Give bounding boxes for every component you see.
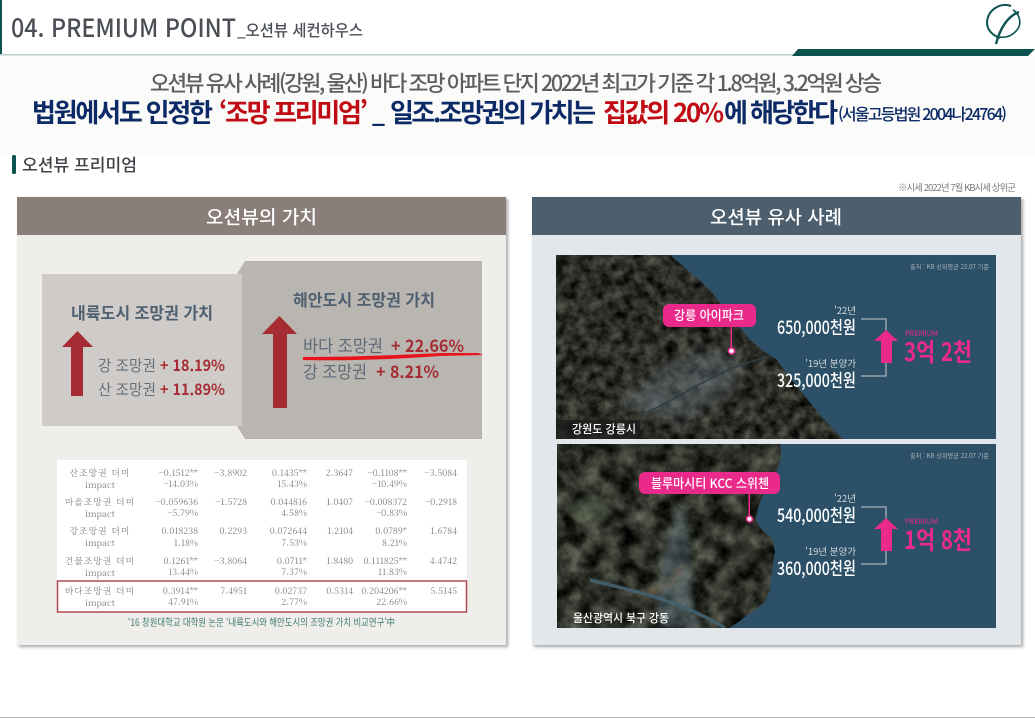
inland view values: 강 조망권 <box>98 354 156 376</box>
regression table: 2.77% <box>281 595 307 608</box>
coastal view values: 강 조망권 <box>303 358 367 383</box>
panel header: cases: 오션뷰 유사 사례 <box>710 204 842 230</box>
regression table: 0.0711* <box>277 554 308 567</box>
regression table: 0.0789* <box>375 524 408 537</box>
prices: '22년 <box>834 491 856 505</box>
headline line 2 <box>32 93 1007 130</box>
prices: 360,000천원 <box>777 555 856 581</box>
premium value: 1억 8천 <box>904 521 972 557</box>
highlighted sea view row <box>58 581 466 612</box>
regression table: −0.1512** <box>159 466 199 479</box>
regression table: −0.059636 <box>156 495 198 508</box>
regression table: 0.1261** <box>164 554 199 567</box>
regression table: 0.5314 <box>326 584 353 597</box>
panel header: value <box>17 197 506 235</box>
map: Gangneung <box>556 255 996 439</box>
map source: 출처 : KB 상위평균 22.07 기준 <box>910 450 989 460</box>
regression table: 1.0407 <box>326 495 353 508</box>
regression table: −0.008372 <box>365 495 407 508</box>
regression table: 0.044816 <box>271 495 307 508</box>
regression table: 건물조망권 더미 <box>65 554 135 567</box>
regression table: −3.5084 <box>425 466 457 479</box>
callout: complex pin: 블루마시티 KCC 스위첸 <box>651 473 769 492</box>
inland city box <box>42 274 242 426</box>
prices <box>777 491 856 581</box>
title: 04. PREMIUM POINT <box>11 9 236 45</box>
regression table: 7.53% <box>281 536 307 549</box>
regression table: 0.072644 <box>270 524 307 537</box>
map source: 출처 : KB 상위평균 22.07 기준 <box>910 261 989 271</box>
inland view values: + 11.89% <box>160 378 225 400</box>
regression table: 7.4951 <box>220 584 247 597</box>
prices: 650,000천원 <box>777 314 856 340</box>
regression table: −10.49% <box>372 477 407 490</box>
headline line 2: 에 해당한다 <box>724 93 838 130</box>
icon: coastal up arrow <box>262 316 297 408</box>
regression table: 7.37% <box>281 565 307 578</box>
regression table: 47.91% <box>168 595 198 608</box>
map: Ulsan <box>557 444 996 628</box>
premium value: 3억 2천 <box>904 333 972 369</box>
title <box>11 9 363 45</box>
regression table: 8.21% <box>382 536 407 549</box>
inland view values <box>98 354 225 400</box>
panel: similar ocean view cases <box>532 197 1021 645</box>
regression table <box>57 460 467 612</box>
panel header: value: 오션뷰의 가치 <box>206 204 317 230</box>
section heading: 오션뷰 프리미엄 <box>22 151 137 176</box>
headline line 2: _ <box>372 93 385 130</box>
premium value: PREMIUM <box>905 516 938 527</box>
logo icon <box>987 5 1020 44</box>
headline line 2: 일조.조망권의 가치는 <box>390 93 596 130</box>
regression table: 0.02737 <box>275 584 307 597</box>
prices <box>777 303 856 393</box>
regression table: impact <box>85 478 116 491</box>
prices: '19년 분양가 <box>805 356 856 370</box>
icon: premium bracket arrow <box>861 507 898 564</box>
table source caption: ‘16 창원대학교 대학원 논문 ‘내륙도시와 해안도시의 조망권 가치 비교연구’中 <box>128 614 395 629</box>
regression table: 2.3647 <box>326 466 353 479</box>
callout: complex pin <box>639 472 780 522</box>
callout: complex pin <box>663 304 756 354</box>
coastal view values: 바다 조망권 <box>303 332 383 357</box>
regression table: impact <box>85 596 116 609</box>
regression table: 11.83% <box>378 565 407 578</box>
regression table: 1.2104 <box>327 524 353 537</box>
regression table: −3.8902 <box>214 466 247 479</box>
headline line 2: 법원에서도 인정한 <box>32 93 213 130</box>
prices: 540,000천원 <box>777 502 856 528</box>
callout: complex pin: 강릉 아이파크 <box>674 305 744 324</box>
regression table: −0.1108** <box>368 466 408 479</box>
regression table: impact <box>85 566 116 579</box>
regression table: 마을조망권 더미 <box>65 495 135 508</box>
map label: region: 울산광역시 북구 강동 <box>573 610 669 626</box>
title: _오션뷰 세컨하우스 <box>237 17 363 41</box>
headline band <box>0 56 1035 154</box>
regression table: 0.1435** <box>272 466 308 479</box>
headline line 2: ‘조망 프리미엄’ <box>219 93 368 130</box>
headline line 2: (서울고등법원 2004나24764) <box>838 101 1007 125</box>
inland view values: 산 조망권 <box>98 378 156 400</box>
coastal city box <box>237 261 483 439</box>
regression table: 0.204206** <box>361 584 408 597</box>
regression table: 0.3914** <box>163 584 199 597</box>
coastal view values <box>303 332 464 383</box>
inland city box: 내륙도시 조망권 가치 <box>71 300 213 324</box>
regression table: −1.5728 <box>215 495 247 508</box>
prices: 325,000천원 <box>777 367 856 393</box>
regression table: −0.83% <box>376 506 407 519</box>
map label: region: 강원도 강릉시 <box>572 421 636 437</box>
icon: premium bracket arrow <box>861 319 898 376</box>
regression table: 13.44% <box>168 565 198 578</box>
regression table: impact <box>85 536 116 549</box>
map label: region <box>556 420 640 439</box>
regression table: 1.8480 <box>326 554 353 567</box>
regression table: −14.03% <box>163 477 198 490</box>
headline line 1: 오션뷰 유사 사례(강원, 울산) 바다 조망 아파트 단지 2022년 최고가 기준 각 1.8억원, 3.2억원 상승 <box>150 67 882 98</box>
regression table: 15.43% <box>277 477 307 490</box>
regression table: 22.66% <box>376 595 407 608</box>
coastal city box: 해안도시 조망권 가치 <box>293 287 435 311</box>
regression table: 4.58% <box>281 506 307 519</box>
icon: inland up arrow <box>62 331 93 396</box>
regression table: 1.18% <box>174 536 198 549</box>
headline line 2: 집값의 20% <box>603 93 724 130</box>
prices: '22년 <box>834 303 856 317</box>
prices: '19년 분양가 <box>805 544 856 558</box>
regression table: −3.8064 <box>215 554 247 567</box>
premium value: PREMIUM <box>905 328 938 339</box>
regression table: 바다조망권 더미 <box>65 584 135 597</box>
regression table: 5.5145 <box>430 584 457 597</box>
panel header: cases <box>532 197 1021 235</box>
coastal view values: + 22.66% <box>391 332 464 357</box>
regression table: 0.018238 <box>162 524 198 537</box>
coastal view values: + 8.21% <box>376 358 439 383</box>
header bar <box>0 0 1035 56</box>
regression table: impact <box>85 507 116 520</box>
regression table: 1.6784 <box>430 524 457 537</box>
regression table: 0.2293 <box>220 524 247 537</box>
regression table: 4.4742 <box>430 554 457 567</box>
regression table: −0.2918 <box>425 495 457 508</box>
regression table: −5.79% <box>167 506 198 519</box>
inland view values: + 18.19% <box>160 354 225 376</box>
panel: ocean view value <box>17 197 506 645</box>
regression table: 산조망권 더미 <box>70 466 130 479</box>
red underline stroke <box>303 353 483 360</box>
regression table: 강조망권 더미 <box>70 524 130 537</box>
price note: ※시세 2022년 7월 KB시세 상위군 <box>898 180 1016 194</box>
regression table: 0.111825** <box>364 554 408 567</box>
